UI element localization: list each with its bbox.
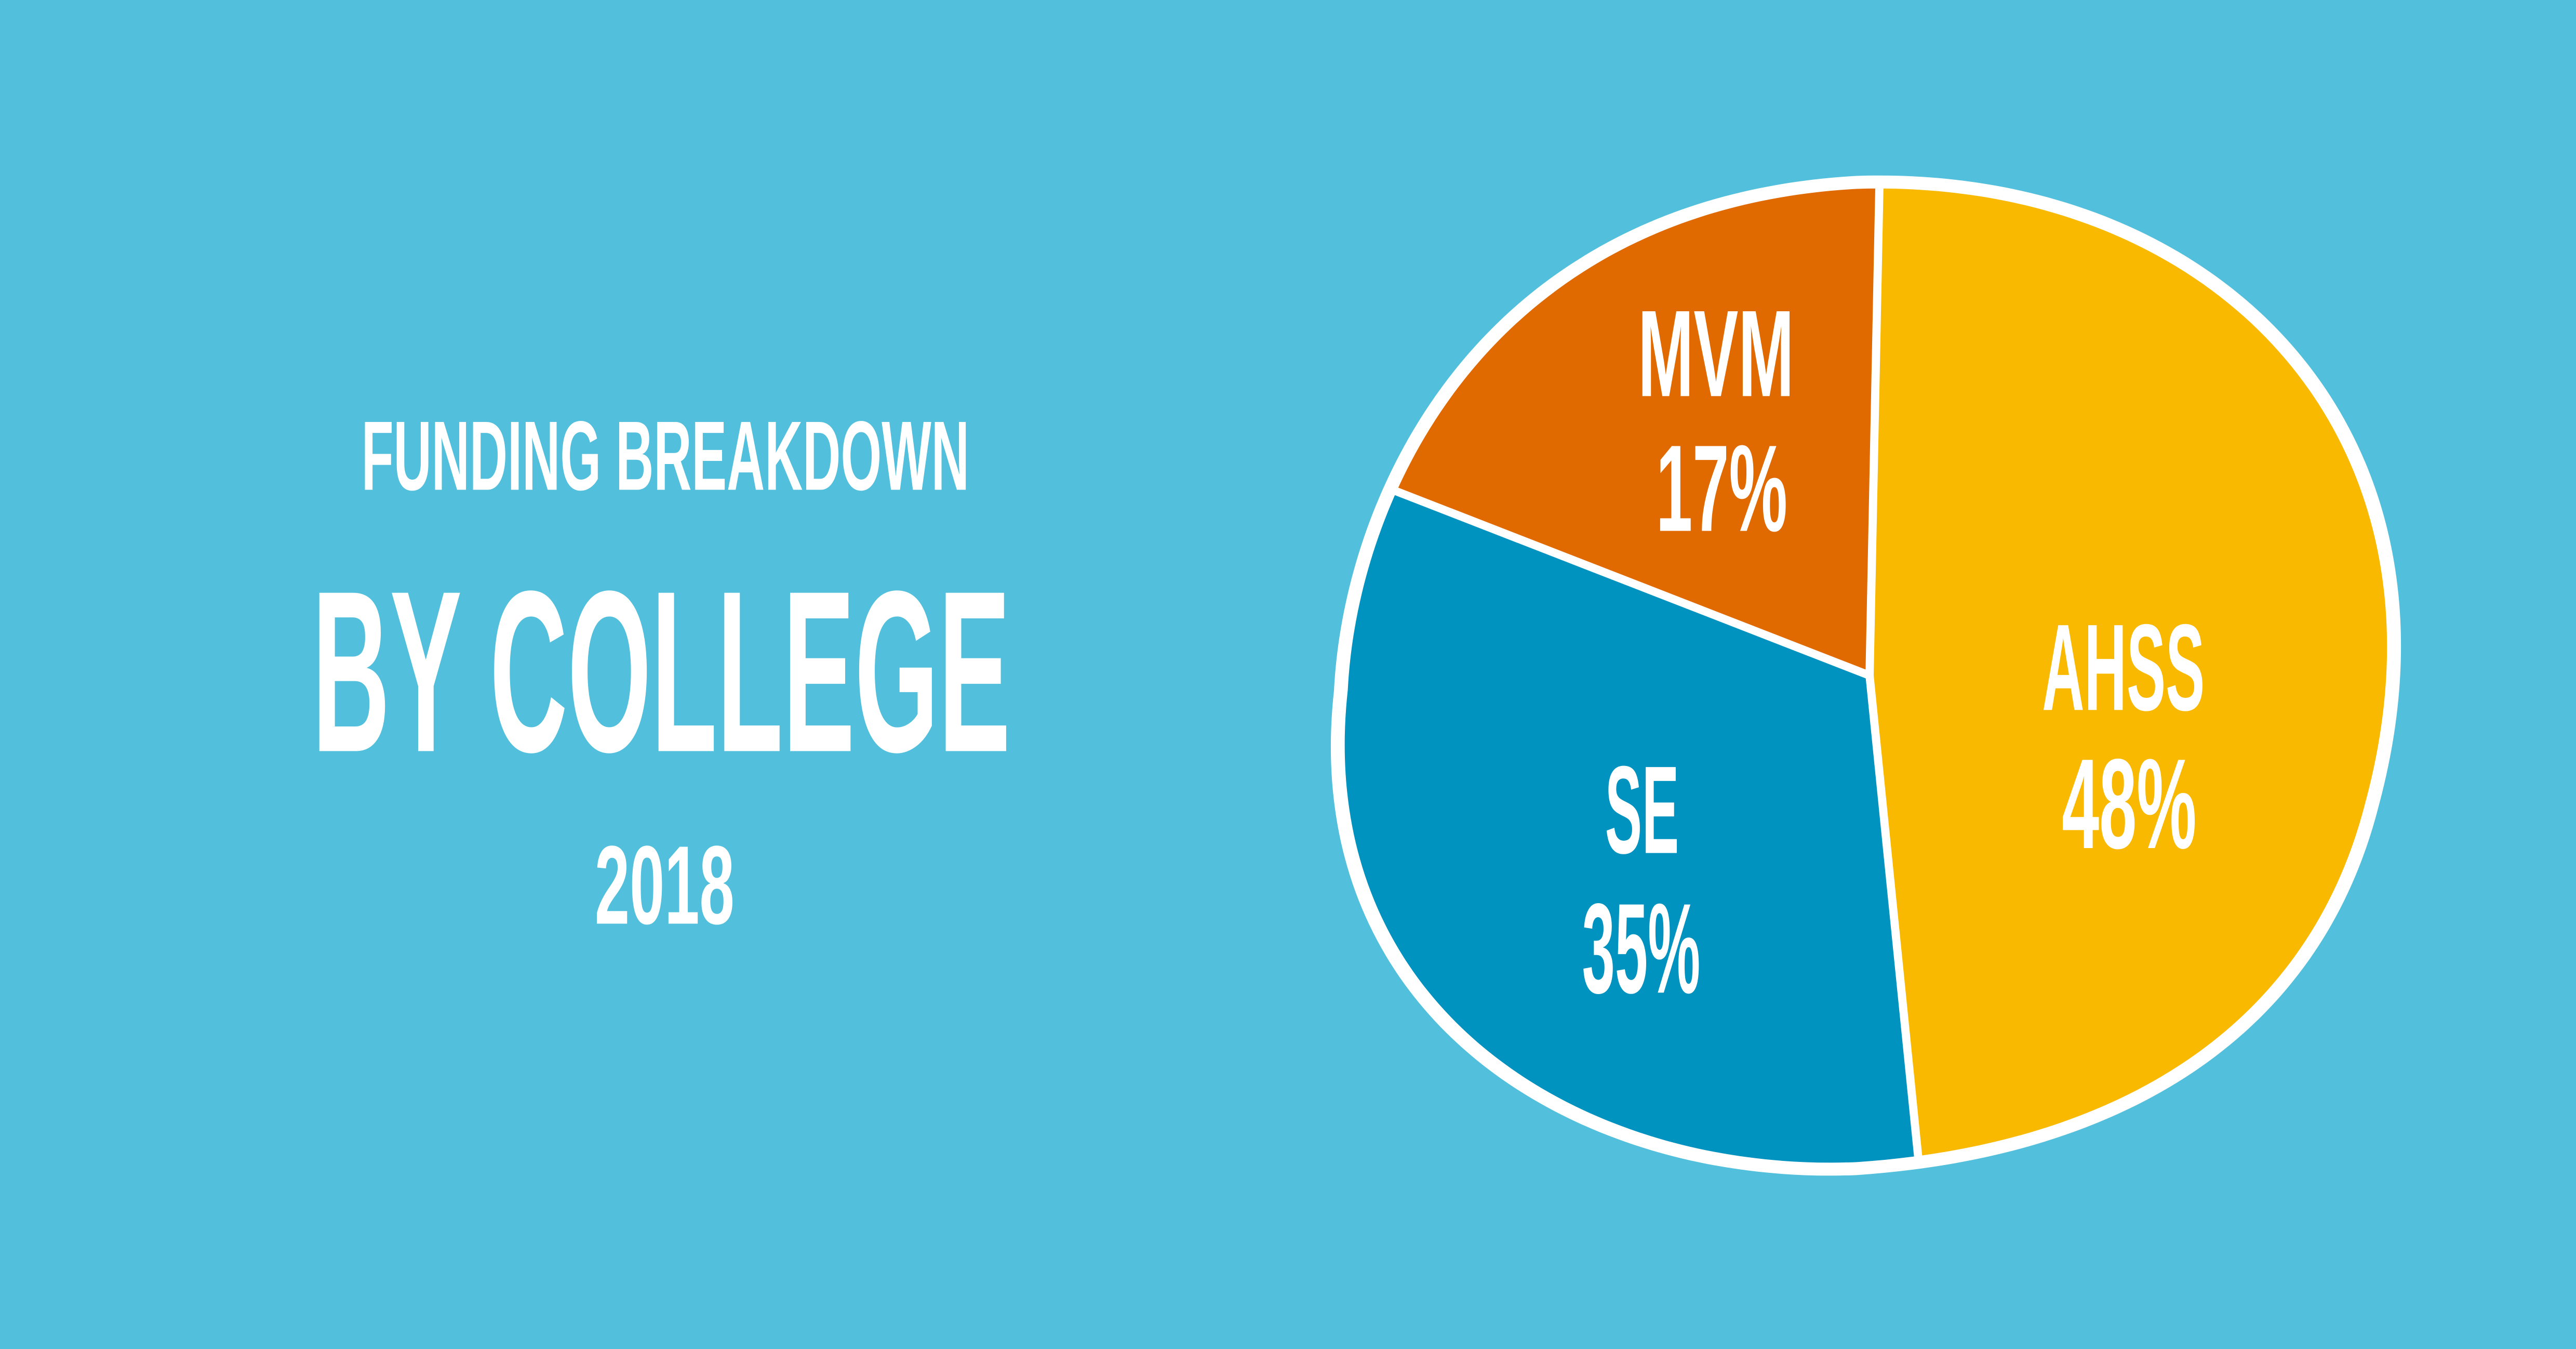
title: funding breakdown: FUNDING BREAKDOWN: [362, 401, 969, 511]
pie chart: AHSS: [2042, 599, 2205, 736]
text: BY COLLEGE: [312, 543, 1010, 800]
label: AHSS 48%: [2042, 599, 2205, 876]
wedge: MVM: [1398, 188, 1875, 669]
label: SE 35%: SE: [1605, 739, 1679, 879]
wedge: AHSS: [1870, 188, 2387, 1156]
label: SE 35%: [1582, 739, 1700, 1020]
pie outline: [1331, 176, 2401, 1175]
dividers: [1388, 184, 1919, 1163]
pie chart: 35%: [1582, 877, 1700, 1020]
label: MVM 17%: MVM: [1638, 285, 1794, 422]
label: MVM 17%: 17%: [1656, 420, 1787, 558]
year: 2018: 2018: [595, 822, 735, 947]
wedges: [1344, 188, 2387, 1163]
label: AHSS 48%: 48%: [2062, 733, 2196, 876]
wedge: SE: [1344, 495, 1914, 1163]
pie chart: [1331, 176, 2401, 1175]
label: MVM 17%: [1638, 285, 1794, 558]
